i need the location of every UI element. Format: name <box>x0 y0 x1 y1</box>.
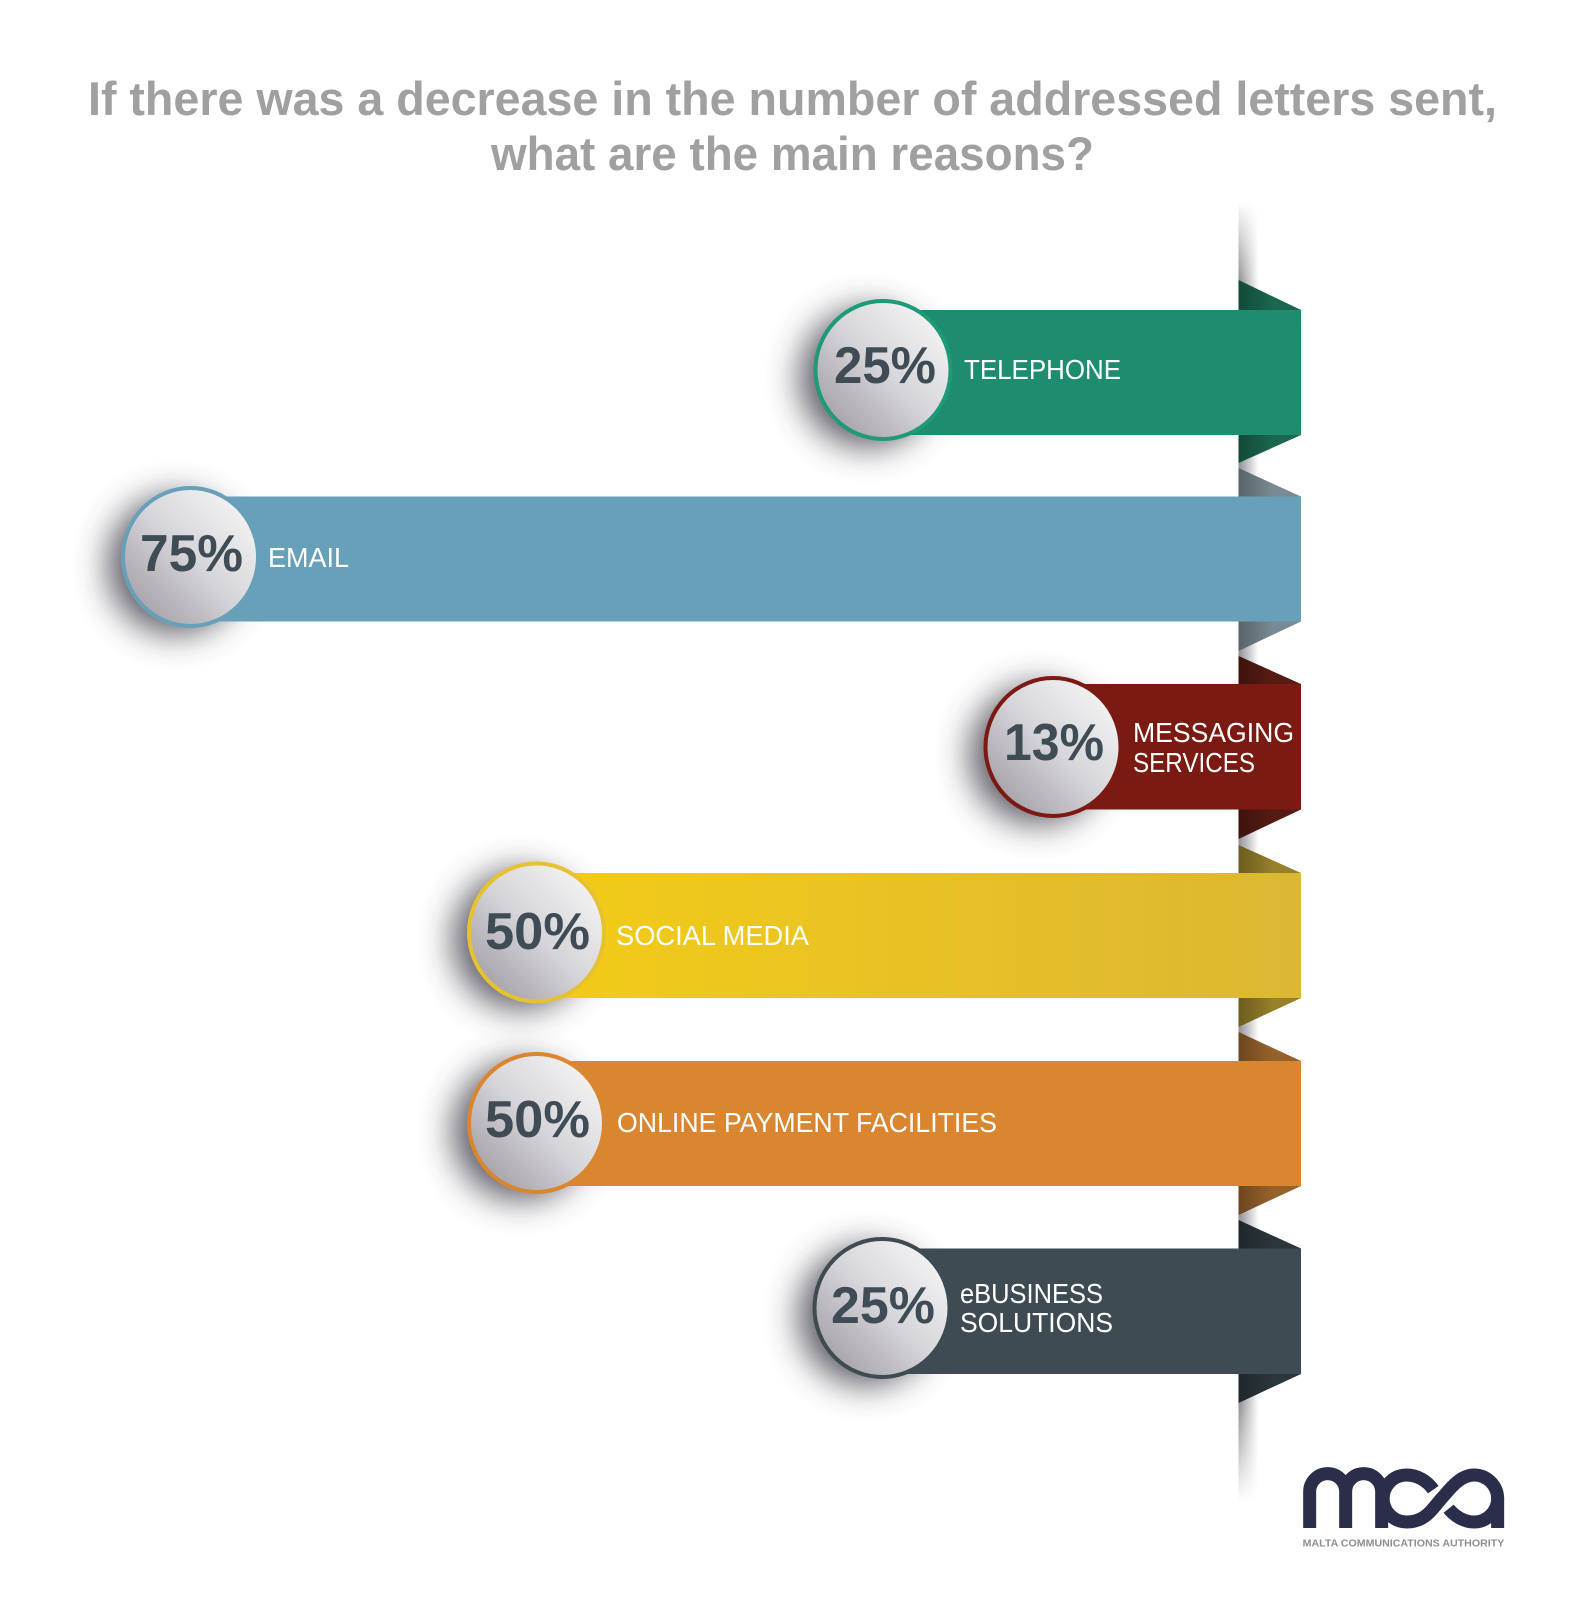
bar: ebusiness solutions 25%: eBUSINESS <box>960 1278 1103 1309</box>
logo: Malta Communications Authority <box>1303 1474 1505 1549</box>
title <box>88 72 1497 180</box>
bar: email 75%: EMAIL <box>268 542 349 573</box>
vertical fold shadow <box>1238 202 1258 1502</box>
bar: messaging services 13%: 13% <box>1004 714 1104 772</box>
title: If there was a decrease in the number of addressed letters sent, <box>88 72 1497 125</box>
title: what are the main reasons? <box>490 127 1094 180</box>
bar: ebusiness solutions 25% <box>799 1220 1301 1403</box>
bar: online payment facilities 50%: ONLINE PAYMENT FACILITIES <box>617 1107 997 1138</box>
bar: telephone 25% <box>800 280 1301 463</box>
bar: social media 50%: 50% <box>485 903 590 961</box>
bar: messaging services 13%: SERVICES <box>1133 747 1255 778</box>
bar: ebusiness solutions 25%: 25% <box>831 1277 935 1335</box>
bar: telephone 25%: 25% <box>834 337 936 395</box>
bar: social media 50%: SOCIAL MEDIA <box>616 920 809 951</box>
bar: ebusiness solutions 25%: SOLUTIONS <box>960 1307 1113 1338</box>
bar: online payment facilities 50%: 50% <box>485 1091 590 1149</box>
bar: messaging services 13%: MESSAGING <box>1133 717 1294 748</box>
bar: email 75%: 75% <box>140 525 243 583</box>
bar: email 75% <box>108 468 1301 651</box>
bar: online payment facilities 50% <box>453 1032 1301 1215</box>
bar: social media 50% <box>453 845 1301 1027</box>
bar: telephone 25%: TELEPHONE <box>964 354 1121 385</box>
bar: messaging services 13% <box>970 656 1301 839</box>
logo: Malta Communications Authority: MALTA COMMUNICATIONS AUTHORITY <box>1303 1538 1505 1549</box>
